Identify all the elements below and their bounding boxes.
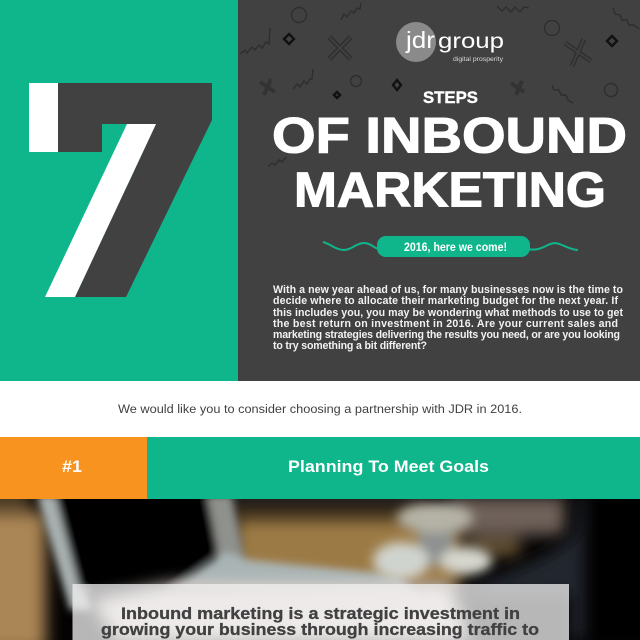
shadow sleeve xyxy=(471,499,592,640)
panel: white statement band xyxy=(0,381,640,437)
callout text xyxy=(101,604,539,639)
ribbon: 2016 here we come xyxy=(323,236,578,257)
panel: green number panel xyxy=(0,0,238,381)
intro paragraph: the best return on investment in 2016. Are your current sales and xyxy=(273,318,618,330)
heading: of inbound: OF INBOUND xyxy=(272,108,627,164)
statement text: We would like you to consider choosing a partnership with JDR in 2016. xyxy=(118,402,522,416)
big number 7 xyxy=(29,83,212,297)
step title: Planning To Meet Goals xyxy=(288,457,489,476)
intro paragraph xyxy=(273,284,624,352)
ribbon: 2016 here we come: 2016, here we come! xyxy=(404,240,507,254)
panel: dark title panel xyxy=(238,0,640,381)
intro paragraph: decide where to allocate their marketing budget for the next year. If xyxy=(273,295,618,307)
intro paragraph: this includes you, you may be wondering what methods to use to get xyxy=(273,307,623,319)
intro paragraph: to try something a bit different? xyxy=(273,340,427,352)
logo: digital prosperity xyxy=(453,57,503,63)
intro paragraph: With a new year ahead of us, for many businesses now is the time to xyxy=(273,284,624,296)
step title xyxy=(147,437,640,499)
intro paragraph: marketing strategies delivering the results you need, or are you looking xyxy=(273,329,620,341)
panel: step 1 header xyxy=(0,437,640,499)
step number: #1 xyxy=(62,457,82,476)
coffee cup xyxy=(373,503,492,580)
heading: marketing: MARKETING xyxy=(294,164,606,218)
callout text: growing your business through increasing traffic to xyxy=(101,620,539,639)
logo: group xyxy=(438,30,504,53)
step number xyxy=(0,437,147,499)
desk xyxy=(0,485,565,640)
panel: blurred desk photo xyxy=(0,485,640,640)
doodle pattern xyxy=(240,3,639,167)
callout: translucent text box xyxy=(72,584,569,640)
laptop screen edge xyxy=(37,495,420,610)
logo xyxy=(396,22,504,63)
heading: steps: STEPS xyxy=(423,88,478,107)
logo: jdr xyxy=(405,27,435,53)
callout text: Inbound marketing is a strategic investment in xyxy=(121,604,520,623)
under-box light surface xyxy=(92,584,470,640)
